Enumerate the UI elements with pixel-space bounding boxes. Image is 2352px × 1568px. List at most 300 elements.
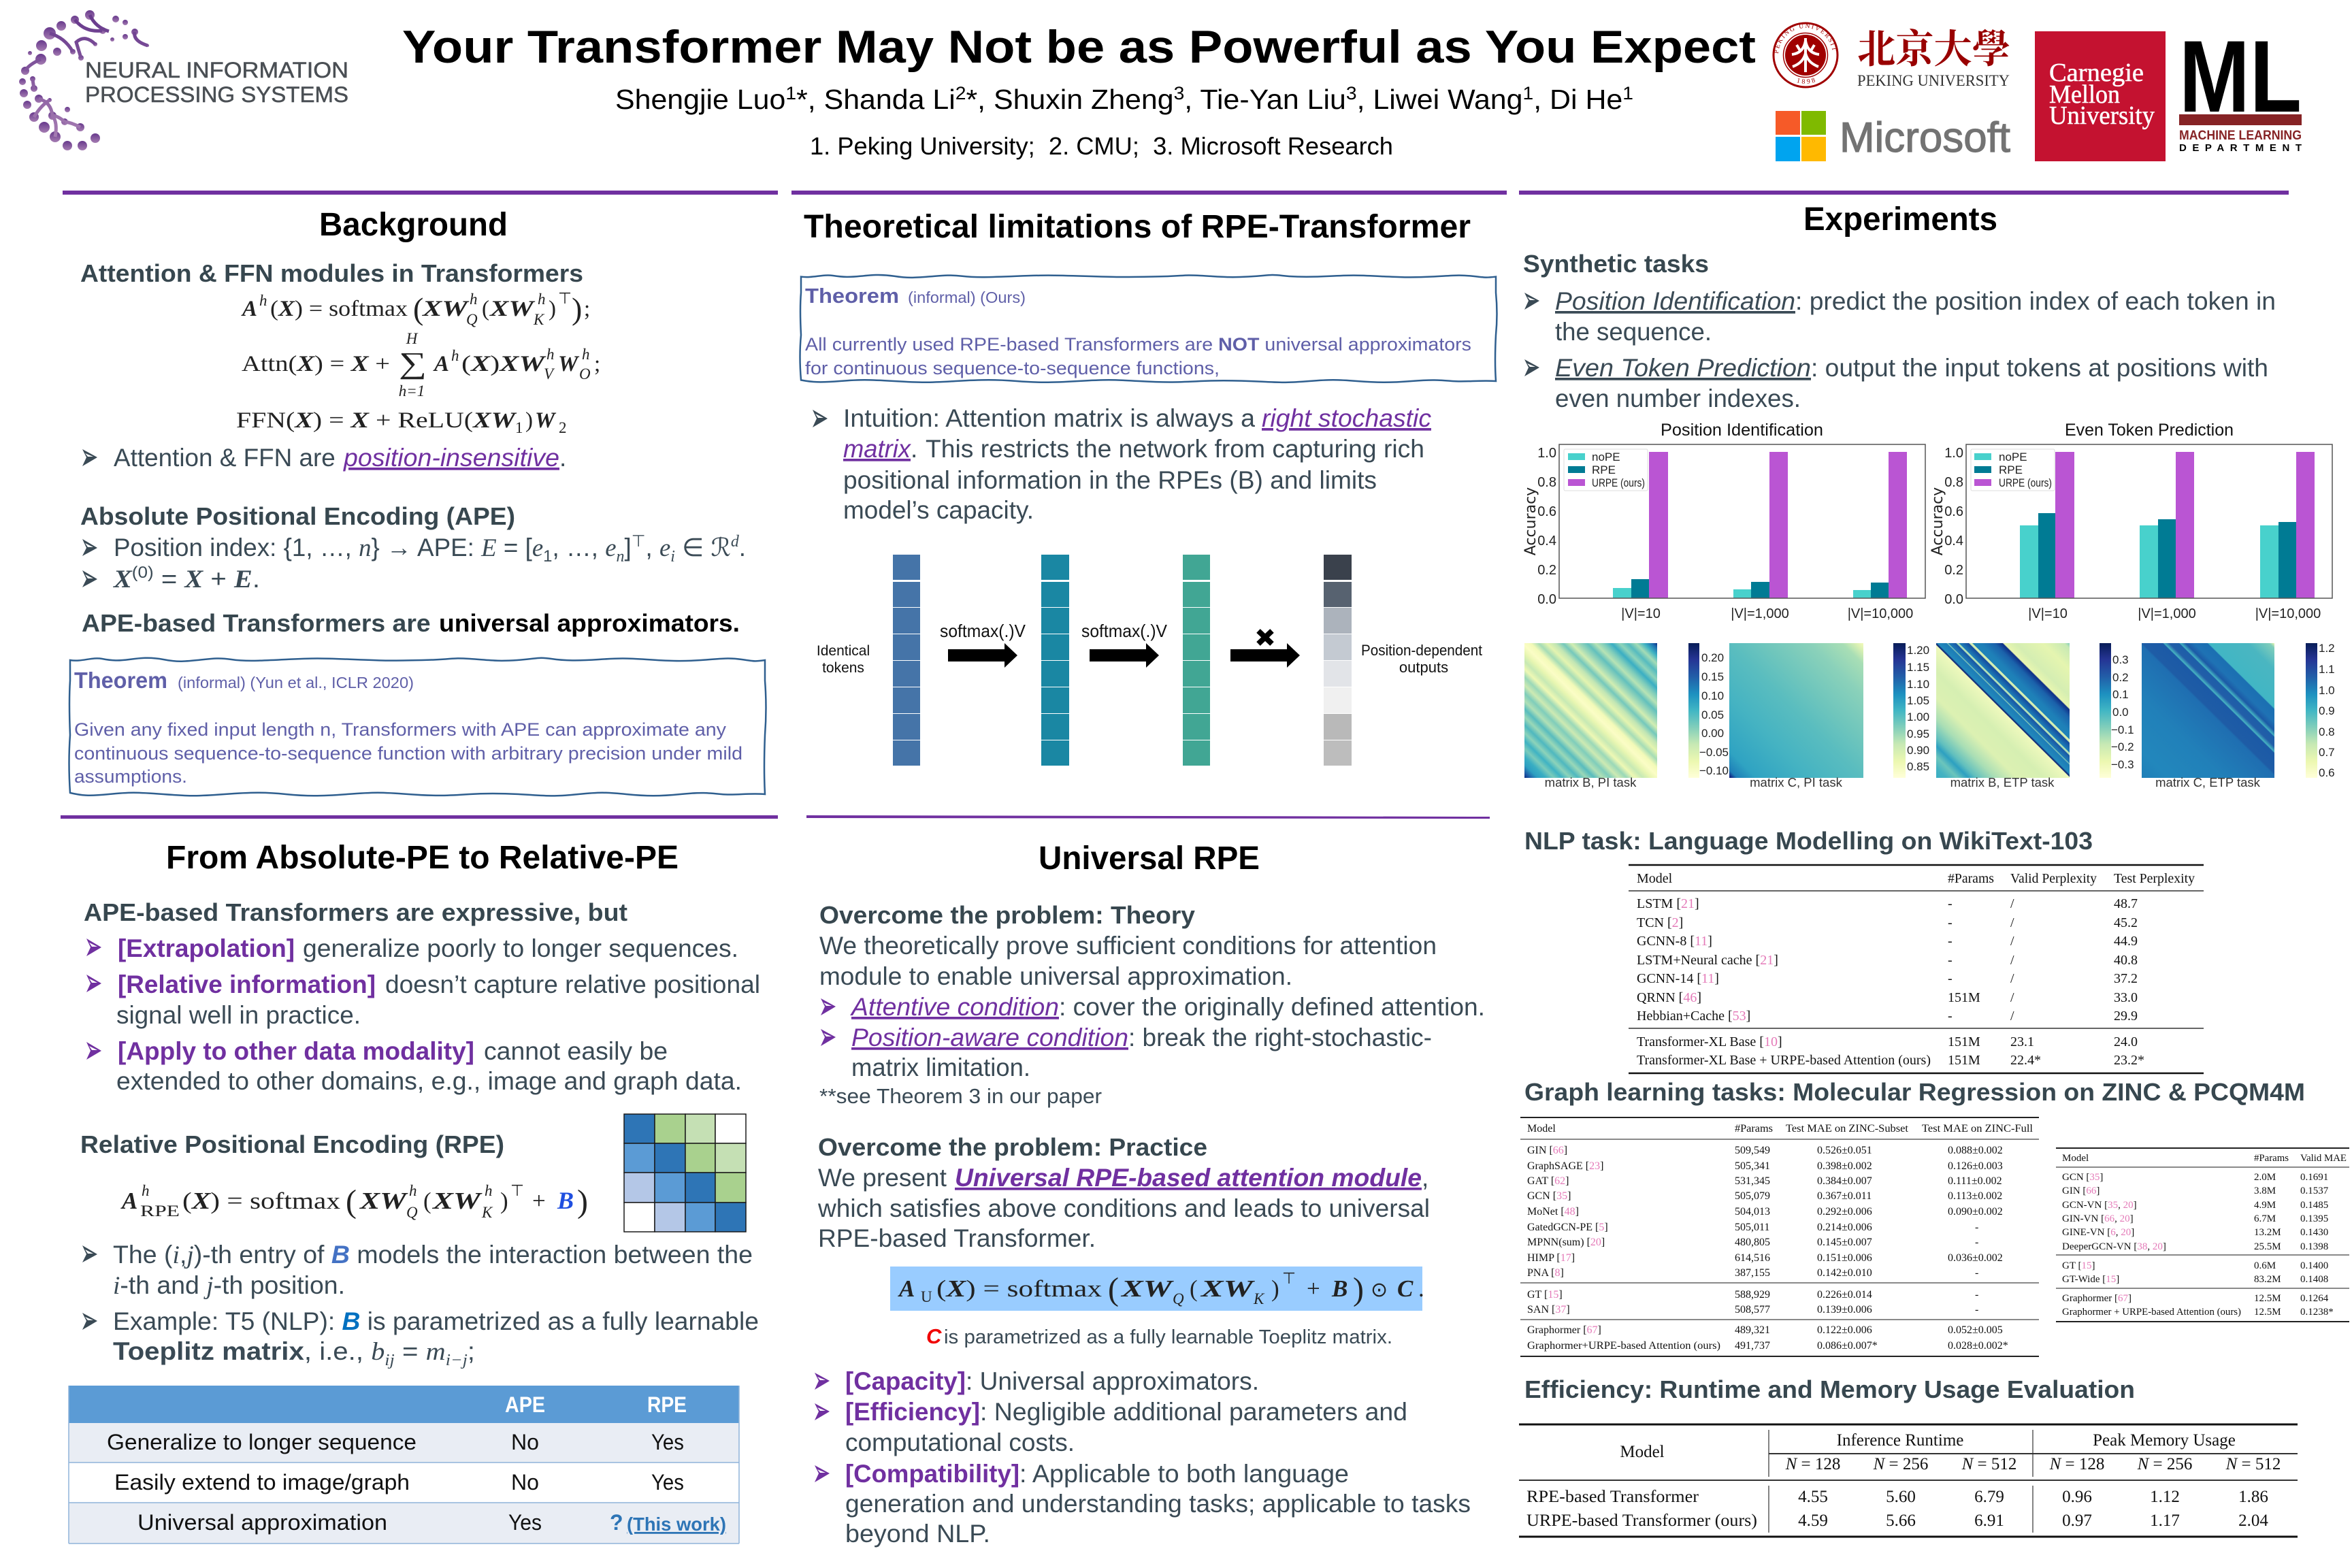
label: first softmax: softmax(.)V: [940, 621, 1026, 641]
table: ZINC: -: [1975, 1222, 1978, 1233]
equation: FFN: ): [525, 408, 533, 433]
table: PCQM4M: 0.1395: [2300, 1213, 2328, 1224]
heatmap: matrix C PI task: 0.90: [1907, 744, 1929, 757]
subheading: graph learning: Graph learning tasks: Molecular Regression on ZINC & PCQM4M: [1524, 1078, 2305, 1106]
equation: attention: ): [572, 291, 582, 326]
logo: NeurIPS: NEURAL INFORMATION: [85, 58, 348, 82]
equation: A U highlighted: XW: [1121, 1275, 1175, 1302]
theorem box: APE: (informal) (Yun et al., ICLR 2020): [178, 674, 414, 691]
table: runtime and memory: 6.91: [1974, 1512, 2004, 1530]
table: PCQM4M: 0.1238*: [2300, 1307, 2334, 1318]
caption: C parametrized: is parametrized as a fully learnable Toeplitz matrix.: [944, 1326, 1392, 1348]
table: PCQM4M: GINE-VN [6, 20]: [2062, 1227, 2134, 1238]
table: PCQM4M: 0.1537: [2300, 1186, 2329, 1196]
heatmap: matrix C ETP task: 1.0: [2319, 684, 2335, 697]
bullet: position index: ∈ ℛ: [675, 534, 731, 561]
bullet: compatibility: [815, 1460, 1471, 1548]
logo: ML department: DEPARTMENT: [2179, 142, 2302, 154]
bullet: other data modality: extended to other domains, e.g., image and graph data.: [116, 1067, 742, 1095]
table: WikiText-103: /: [2010, 971, 2014, 986]
bar chart: even token prediction: [1929, 421, 2332, 621]
table: runtime and memory: 5.60: [1886, 1488, 1916, 1506]
bullet: position identification: the sequence.: [1555, 318, 1712, 346]
bullet: capacity: : Universal approximators.: [966, 1367, 1259, 1395]
table: WikiText-103: -: [1948, 896, 1953, 911]
table: WikiText-103: -: [1948, 934, 1953, 949]
bullet: position index: e: [605, 534, 617, 562]
panel: Background: [63, 191, 778, 796]
table: WikiText-103: /: [2010, 934, 2014, 949]
bullet: X(0): =: [154, 565, 184, 593]
logo: Carnegie Mellon University: [2035, 31, 2166, 161]
equation: A RPE: RPE: [140, 1203, 180, 1220]
table: PCQM4M: 0.1408: [2300, 1274, 2328, 1285]
bar chart: position identification: 0.8: [1537, 475, 1556, 490]
bullet: position-insensitive: .: [559, 444, 566, 472]
panel: Theoretical limitations: [791, 191, 1507, 766]
bullet: T5 Toeplitz: i−j: [446, 1352, 468, 1369]
equation: Attn: h: [546, 346, 554, 363]
table: PCQM4M: GCN-VN [35, 20]: [2062, 1200, 2137, 1211]
comparison table: No: [511, 1430, 539, 1454]
table: runtime and memory: 1.12: [2150, 1488, 2180, 1506]
heatmap: matrix B ETP task: 0.0: [2112, 706, 2129, 719]
legend: noPE: [1592, 451, 1620, 463]
comparison table: Yes: [508, 1510, 542, 1535]
bullet: position identification: : predict the position index of each token in: [1795, 287, 2276, 315]
equation: A RPE: h: [142, 1182, 150, 1199]
table: ZINC: 0.367±0.011: [1817, 1190, 1872, 1202]
text: theory: module to enable universal approximation.: [819, 962, 1292, 990]
table: runtime and memory: RPE-based Transformer: [1526, 1488, 1699, 1506]
authors: *, Shuxin Zheng: [966, 84, 1174, 115]
bullet: compatibility: : Applicable to both language: [1019, 1460, 1349, 1488]
heatmap: matrix C PI task: 0.95: [1907, 728, 1929, 740]
table: ZINC: PNA [8]: [1527, 1267, 1564, 1279]
panel: From Absolute-PE to Relative-PE: [61, 815, 778, 1544]
table: ZINC: 0.088±0.002: [1948, 1145, 2003, 1156]
equation: A RPE: ⊤: [510, 1182, 524, 1199]
bullet: position-aware condition: Position-aware condition: [851, 1024, 1128, 1051]
bullet: position-aware condition: [821, 1024, 1432, 1081]
equation: A RPE: (: [423, 1188, 431, 1214]
table: PCQM4M: 6.7M: [2254, 1213, 2276, 1224]
comparison table: Universal approximation: [137, 1510, 387, 1535]
equation: A RPE: [120, 1182, 588, 1221]
table: ZINC: 0.145±0.007: [1817, 1237, 1872, 1248]
table: ZINC: 0.126±0.003: [1948, 1160, 2003, 1172]
table: WikiText-103: -: [1948, 915, 1953, 930]
table: ZINC: 0.113±0.002: [1948, 1190, 2002, 1202]
bullet: compatibility: generation and understanding tasks; applicable to tasks: [845, 1490, 1471, 1518]
bullet: position index: e: [659, 534, 670, 562]
equation: Attn: ;: [594, 352, 600, 376]
bullet: relative information: [86, 970, 760, 1029]
equation: FFN: W: [535, 408, 557, 433]
table: PCQM4M: 0.1400: [2300, 1260, 2328, 1271]
table: PCQM4M: Graphormer [67]: [2062, 1293, 2132, 1304]
theorem box: APE: [69, 658, 766, 796]
bullet: T5 Toeplitz: ij: [385, 1352, 395, 1369]
table: PCQM4M: 0.1430: [2300, 1227, 2328, 1238]
bullet: intuition: Intuition: Attention matrix is always a: [843, 404, 1255, 432]
bullet: position index: Position index: {1, …, n} → APE: E = [e: [114, 534, 543, 562]
table: WikiText-103: /: [2010, 915, 2014, 930]
equation: A U highlighted: (: [1190, 1275, 1198, 1302]
table: WikiText-103: Model: [1637, 871, 1673, 886]
bullet: even token prediction: : output the input tokens at positions with: [1811, 354, 2268, 382]
subheading: synthetic tasks: Synthetic tasks: [1523, 250, 1709, 278]
label: identical tokens: [817, 643, 870, 676]
authors: 3: [1346, 83, 1357, 103]
bar chart: even token prediction: 0.8: [1944, 475, 1963, 490]
heatmap: matrix C ETP task: 0.8: [2319, 725, 2335, 738]
table: ZINC: [1520, 1117, 2039, 1356]
equation: A U highlighted: B: [1331, 1275, 1348, 1302]
equation: A U highlighted: ): [1353, 1271, 1364, 1307]
bar chart: position identification: [1522, 421, 1925, 621]
statement: universal approximators: [82, 609, 740, 637]
bullet: position index: ]: [624, 534, 632, 561]
equation: A U highlighted: U: [921, 1288, 932, 1305]
subheading: NLP task: NLP task: Language Modelling on WikiText-103: [1524, 827, 2093, 855]
heatmap: matrix B PI task: matrix B, PI task: [1545, 775, 1637, 789]
text: theory: [819, 932, 1437, 990]
table: WikiText-103: /: [2010, 990, 2014, 1005]
bar chart: position identification: 0.6: [1537, 504, 1556, 519]
bullet: other data modality: [Apply to other data modality]: [118, 1037, 474, 1065]
bullet: attentive condition: [821, 993, 1485, 1021]
equation: A RPE: (X) = softmax: [182, 1188, 341, 1214]
logo: Carnegie Mellon University: Carnegie: [2049, 59, 2144, 87]
equation: FFN: FFN( X) = X + ReLU( XW: [236, 408, 517, 433]
table: PCQM4M: GT-Wide [15]: [2062, 1274, 2119, 1285]
table: WikiText-103: LSTM [21]: [1637, 896, 1699, 911]
heatmap: matrix C PI task: 0.85: [1907, 760, 1929, 773]
equation: A RPE: B: [557, 1187, 574, 1214]
table: WikiText-103: 151M: [1948, 1053, 1980, 1068]
heatmap: matrix C PI task: [1729, 643, 1929, 789]
subheading: APE: Absolute Positional Encoding (APE): [80, 502, 515, 530]
table: PCQM4M: 12.5M: [2254, 1307, 2281, 1318]
table: ZINC: 588,929: [1735, 1289, 1770, 1301]
legend: URPE (ours): [1592, 476, 1645, 489]
table: runtime and memory: URPE-based Transformer (ours): [1526, 1512, 1757, 1530]
table: PCQM4M: 0.6M: [2254, 1260, 2276, 1271]
logo: Peking University: 北京大學: [1857, 27, 2010, 71]
theorem box: ours: (informal) (Ours): [908, 289, 1026, 306]
statement: universal approximators: universal approximators.: [439, 609, 740, 637]
table: PCQM4M: 83.2M: [2254, 1274, 2281, 1285]
theorem box: APE: assumptions.: [74, 766, 187, 787]
token column: position-dependent outputs: [1324, 555, 1352, 766]
bar chart: position identification: Accuracy: [1522, 487, 1539, 555]
table: ZINC: 0.526±0.051: [1817, 1145, 1872, 1156]
equation: A U highlighted: (: [1108, 1271, 1119, 1307]
heatmap: matrix B ETP task: [1936, 643, 2134, 789]
table: PCQM4M: 0.1691: [2300, 1172, 2328, 1183]
heatmap: matrix C PI task: 1.15: [1907, 661, 1929, 674]
equation: attention: ;: [584, 297, 590, 321]
heatmap: matrix C PI task: 1.20: [1907, 644, 1929, 657]
legend: URPE (ours): [1999, 476, 2052, 489]
subheading: expressive: APE-based Transformers are expressive, but: [84, 898, 627, 926]
table: ZINC: GatedGCN-PE [5]: [1527, 1222, 1608, 1233]
table: ZINC: 0.122±0.006: [1817, 1324, 1872, 1336]
bullet: T5 Toeplitz: Toeplitz matrix , i.e., b: [113, 1337, 384, 1366]
heatmap: matrix B PI task: −0.10: [1699, 764, 1729, 777]
comparison table: Yes: [651, 1470, 684, 1494]
label: position-dependent outputs: outputs: [1399, 659, 1448, 676]
affiliations: 1. Peking University; 2. CMU; 3. Microsoft Research: [810, 132, 1393, 160]
table: runtime and memory: [1519, 1424, 2298, 1537]
bullet: entry of B: [82, 1241, 753, 1300]
heatmap: matrix B PI task: −0.05: [1699, 746, 1729, 759]
authors: Shengjie Luo: [615, 84, 778, 115]
theorem box: APE: continuous sequence-to-sequence function with arbitrary precision under mild: [74, 743, 742, 764]
bullet: position index: , …,: [552, 534, 605, 561]
table: WikiText-103: LSTM+Neural cache [21]: [1637, 953, 1778, 968]
theorem box: APE: Theorem: [74, 668, 167, 693]
equation: FFN: 1: [515, 419, 523, 436]
table: ZINC: 0.384±0.007: [1817, 1175, 1872, 1187]
table: WikiText-103: 48.7: [2114, 896, 2138, 911]
bullet: position index: n: [617, 548, 624, 566]
table: ZINC: MoNet [48]: [1527, 1206, 1579, 1218]
text: practice: which satisfies above conditions and leads to universal: [817, 1194, 1430, 1222]
table: PCQM4M: 0.1398: [2300, 1241, 2328, 1252]
table: runtime and memory: 6.79: [1974, 1488, 2004, 1506]
table: runtime and memory: 0.97: [2062, 1512, 2092, 1530]
panel: Universal RPE: [806, 815, 1490, 1548]
table: ZINC: 0.139±0.006: [1817, 1304, 1872, 1316]
equation: A RPE: K: [481, 1204, 493, 1221]
equation: FFN: 2: [559, 419, 566, 436]
bullet: position index: i: [670, 548, 675, 566]
bullet: extrapolation: [Extrapolation]: [118, 934, 295, 962]
table: ZINC: 0.036±0.002: [1948, 1252, 2003, 1264]
heatmap: matrix B ETP task: 0.1: [2112, 688, 2129, 701]
subheading: efficiency: Efficiency: Runtime and Memory Usage Evaluation: [1524, 1375, 2135, 1403]
heatmap: matrix C ETP task: 1.2: [2319, 642, 2335, 655]
authors: , Liwei Wang: [1357, 84, 1522, 115]
table: WikiText-103: 151M: [1948, 990, 1980, 1005]
heatmap: matrix B ETP task: 0.3: [2112, 653, 2129, 666]
equation: Attn: W: [558, 352, 580, 376]
authors: 1: [785, 83, 796, 103]
table: ZINC: 489,321: [1735, 1324, 1770, 1336]
heading: experiments: Experiments: [1803, 201, 1997, 238]
heatmap: matrix B PI task: [1524, 643, 1729, 789]
table: ZINC: 505,079: [1735, 1190, 1770, 1202]
table: ZINC: MPNN(sum) [20]: [1527, 1237, 1605, 1248]
label: position-dependent outputs: Position-dependent: [1361, 642, 1482, 659]
table: ZINC: 0.226±0.014: [1817, 1289, 1872, 1301]
table: PCQM4M: GT [15]: [2062, 1260, 2095, 1271]
heading: universal RPE: Universal RPE: [1039, 840, 1260, 877]
heatmap: matrix C ETP task: 0.9: [2319, 704, 2335, 717]
equation: A U highlighted: C: [1397, 1275, 1414, 1302]
heatmap: matrix B ETP task: 0.2: [2112, 671, 2129, 684]
logo: ML department: MACHINE LEARNING: [2179, 129, 2302, 143]
statement: universal approximators: APE-based Transformers are: [82, 609, 438, 637]
equation: A U highlighted: XW: [1200, 1275, 1256, 1302]
bullet: position identification: Position Identification: [1555, 287, 1795, 315]
logo: Microsoft: Microsoft: [1840, 114, 2010, 161]
bullet: intuition: This restricts the network from capturing rich: [926, 435, 1424, 463]
label: identical tokens: tokens: [822, 660, 864, 676]
table: WikiText-103: TCN [2]: [1637, 915, 1683, 930]
label: position-dependent outputs: [1361, 642, 1482, 676]
table: ZINC: -: [1975, 1304, 1978, 1316]
table: ZINC: GAT [62]: [1527, 1175, 1569, 1187]
bar chart: position identification: |V|=10: [1621, 606, 1661, 621]
theorem box: ours: [800, 275, 1497, 382]
comparison table: Generalize to longer sequence: [107, 1430, 416, 1454]
table: PCQM4M: 4.9M: [2254, 1200, 2276, 1211]
heatmap: matrix B ETP task: −0.1: [2111, 723, 2134, 736]
heading: from absolute to relative: From Absolute-PE to Relative-PE: [166, 840, 679, 876]
theorem box: APE: Given any fixed input length n, Transformers with APE can approximate any: [74, 719, 727, 740]
equation: A RPE: Q: [406, 1204, 418, 1221]
bullet: efficiency: [815, 1398, 1407, 1456]
arrow: second softmax: [1090, 643, 1159, 668]
table: WikiText-103: 37.2: [2114, 971, 2138, 986]
bullet: other data modality: [86, 1037, 742, 1095]
bullet: T5 Toeplitz: Example: T5 (NLP): B is parametrized as a fully learnable: [113, 1307, 759, 1335]
table: runtime and memory: Model: [1620, 1443, 1665, 1461]
table: WikiText-103: -: [1948, 953, 1953, 968]
table: runtime and memory: 1.17: [2150, 1512, 2180, 1530]
text: practice: ,: [1422, 1164, 1428, 1192]
bar chart: position identification: |V|=10,000: [1848, 606, 1913, 621]
bullet: position index: d: [731, 533, 740, 551]
equation: attention: h: [470, 291, 478, 308]
bullet: relative information: doesn’t capture relative positional: [385, 970, 760, 998]
theorem box: ours: for continuous sequence-to-sequence functions,: [805, 358, 1220, 378]
title: Your Transformer May Not be as Powerful as You Expect: [402, 21, 1756, 73]
bullet: X(0): X: [113, 566, 133, 593]
subheading: RPE: Relative Positional Encoding (RPE): [80, 1130, 504, 1158]
equation: Attn: [242, 330, 600, 399]
table: PCQM4M: 2.0M: [2254, 1172, 2276, 1183]
table: WikiText-103: -: [1948, 1009, 1953, 1024]
bullet: attentive condition: : cover the originally defined attention.: [1059, 993, 1485, 1021]
text: practice: [817, 1164, 1430, 1252]
table: WikiText-103: /: [2010, 953, 2014, 968]
logo: NeurIPS: [19, 10, 348, 150]
table: ZINC: HIMP [17]: [1527, 1252, 1575, 1264]
bullet: intuition: .: [911, 435, 917, 463]
table: ZINC: Test MAE on ZINC-Subset: [1786, 1123, 1909, 1134]
table: ZINC: -: [1975, 1267, 1978, 1279]
table: runtime and memory: 2.04: [2238, 1512, 2268, 1530]
table: ZINC: GraphSAGE [23]: [1527, 1160, 1603, 1172]
table: ZINC: 0.214±0.006: [1817, 1222, 1872, 1233]
table: runtime and memory: 5.66: [1886, 1512, 1916, 1530]
theorem box: ours: Theorem: [805, 284, 899, 308]
table: WikiText-103: Transformer-XL Base [10]: [1637, 1034, 1782, 1049]
equation: A U highlighted: ): [1271, 1275, 1279, 1302]
table: PCQM4M: DeeperGCN-VN [38, 20]: [2062, 1241, 2166, 1252]
table: ZINC: SAN [37]: [1527, 1304, 1570, 1316]
heatmap: matrix C ETP task: 0.7: [2319, 746, 2335, 759]
equation: Attn: Attn( X) = X +: [242, 352, 390, 376]
bullet: T5 Toeplitz: =: [395, 1337, 426, 1365]
bullet: compatibility: beyond NLP.: [845, 1520, 990, 1548]
theorem box: ours: All currently used RPE-based Transformers are NOT universal approximators: [805, 334, 1471, 355]
equation: Attn: h: [451, 347, 459, 364]
bullet: T5 Toeplitz: ;: [468, 1337, 475, 1365]
legend: noPE: [1999, 451, 2027, 463]
bullet: intuition: positional information in the RPEs (B) and limits: [843, 466, 1377, 494]
heatmap: matrix B ETP task: matrix B, ETP task: [1950, 775, 2055, 789]
bar chart: position identification: 0.4: [1537, 534, 1556, 549]
legend: [1971, 449, 2055, 491]
table: WikiText-103: [1629, 865, 2204, 1073]
equation: A RPE: ): [500, 1188, 508, 1214]
bullet: X(0): [82, 564, 260, 593]
authors: , Tie-Yan Liu: [1184, 84, 1346, 115]
comparison table: RPE: [647, 1392, 687, 1417]
bar chart: even token prediction: 0.0: [1944, 592, 1963, 607]
equation: attention: [241, 290, 590, 328]
table: runtime and memory: N = 128: [2049, 1455, 2104, 1473]
table: ZINC: Test MAE on ZINC-Full: [1922, 1123, 2034, 1134]
table: PCQM4M: #Params: [2254, 1153, 2289, 1164]
table: ZINC: -: [1975, 1237, 1978, 1248]
heatmap: matrix B ETP task: −0.2: [2111, 740, 2134, 753]
equation: A RPE: ): [577, 1183, 588, 1220]
comparison table: (This work): [627, 1514, 726, 1535]
icon: cross mark: [1258, 631, 1272, 644]
heatmap: matrix C ETP task: [2142, 642, 2335, 789]
legend: [1564, 449, 1648, 491]
table: runtime and memory: N = 512: [1961, 1455, 2016, 1473]
bar chart: even token prediction: 0.6: [1944, 504, 1963, 519]
subheading: theory: Overcome the problem: Theory: [819, 901, 1195, 929]
bullet: T5 Toeplitz: [82, 1307, 759, 1369]
equation: attention: ): [549, 297, 556, 321]
table: WikiText-103: Transformer-XL Base + URPE-based Attention (ours): [1637, 1053, 1931, 1068]
heatmap: matrix C PI task: 1.05: [1907, 694, 1929, 707]
logo: ML department: ML: [2179, 19, 2302, 133]
table: WikiText-103: 33.0: [2114, 990, 2138, 1005]
bullet: intuition: matrix: [843, 435, 911, 463]
table: ZINC: 614,516: [1735, 1252, 1770, 1264]
equation: Attn: h: [582, 346, 589, 363]
table: ZINC: 480,805: [1735, 1237, 1770, 1248]
table: WikiText-103: QRNN [46]: [1637, 990, 1701, 1005]
authors: 2: [956, 83, 966, 103]
bullet: T5 Toeplitz: m: [426, 1338, 446, 1366]
bullet: efficiency: computational costs.: [845, 1428, 1075, 1456]
table: WikiText-103: 151M: [1948, 1034, 1980, 1049]
table: WikiText-103: GCNN-8 [11]: [1637, 934, 1712, 949]
table: PCQM4M: GIN [66]: [2062, 1186, 2100, 1196]
table: runtime and memory: 1.86: [2238, 1488, 2268, 1506]
equation: attention: ⊤: [558, 290, 572, 307]
table: WikiText-103: 40.8: [2114, 953, 2138, 968]
bullet: entry of B: i-th and j-th position.: [113, 1271, 345, 1300]
table: PCQM4M: Valid MAE: [2300, 1153, 2347, 1164]
table: ZINC: 387,155: [1735, 1267, 1770, 1279]
table: ZINC: GT [15]: [1527, 1289, 1563, 1301]
equation: attention: (X) = softmax: [270, 297, 408, 321]
authors: *, Shanda Li: [796, 84, 956, 115]
note: see theorem: **see Theorem 3 in our paper: [819, 1084, 1102, 1108]
table: runtime and memory: 0.96: [2062, 1488, 2092, 1506]
